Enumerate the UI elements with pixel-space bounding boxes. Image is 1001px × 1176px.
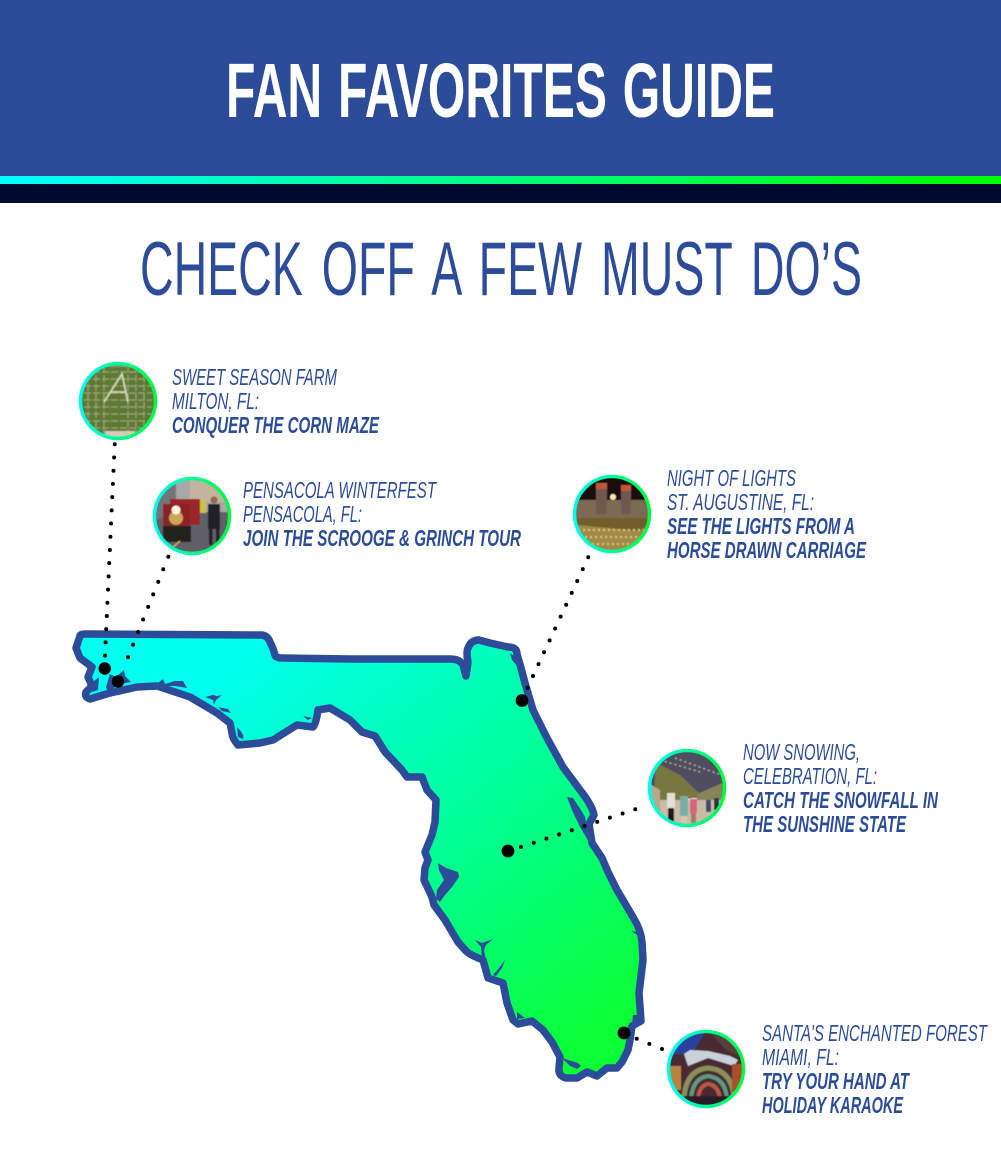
label: Santa's Enchanted Forest: HOLIDAY KARAOKE [762,1092,903,1118]
label: Pensacola Winterfest: JOIN THE SCROOGE & GRINCH TOUR [243,525,521,551]
label: Now Snowing [743,739,938,837]
inland bays and lagoons [92,653,639,1069]
label: Night of Lights: NIGHT OF LIGHTS [667,465,796,491]
photo: corn maze [78,361,158,441]
header banner [0,0,1001,203]
label: Sweet Season Farm: SWEET SEASON FARM [172,364,338,390]
label: Night of Lights: ST. AUGUSTINE, FL: [667,489,814,515]
label: Now Snowing: CELEBRATION, FL: [743,763,877,789]
dotted leader lines [105,444,662,1049]
label: Sweet Season Farm: CONQUER THE CORN MAZE [172,412,379,438]
photo: Now Snowing [647,748,727,830]
photo: Santa's Enchanted Forest [666,1029,746,1109]
location markers [98,662,630,1039]
label: Sweet Season Farm [172,364,379,438]
label: Santa's Enchanted Forest [762,1020,988,1118]
label: Pensacola Winterfest: PENSACOLA WINTERFEST [243,477,437,503]
label: Pensacola Winterfest [243,477,521,551]
label: Now Snowing: THE SUNSHINE STATE [743,811,906,837]
photo: Night of Lights [572,474,652,555]
map of Florida [76,634,643,1078]
label: Pensacola Winterfest: PENSACOLA, FL: [243,501,362,527]
photo: Pensacola train [152,476,232,556]
label: Night of Lights: HORSE DRAWN CARRIAGE [667,537,866,563]
label: Night of Lights [667,465,866,563]
label: Night of Lights: SEE THE LIGHTS FROM A [667,513,855,539]
label: Now Snowing: NOW SNOWING, [743,739,860,765]
label: Santa's Enchanted Forest: MIAMI, FL: [762,1044,839,1070]
label: Santa's Enchanted Forest: TRY YOUR HAND AT [762,1068,910,1094]
label: Sweet Season Farm: MILTON, FL: [172,388,259,414]
